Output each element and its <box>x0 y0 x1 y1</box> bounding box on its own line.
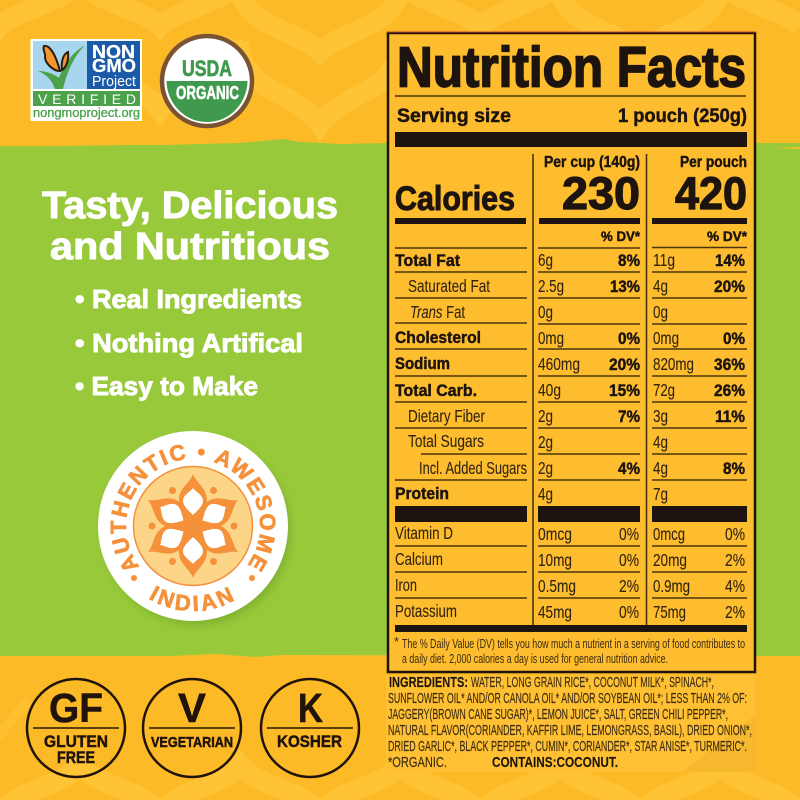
ingredients block: INGREDIENTS: <box>389 674 468 691</box>
row: total sugars: 4g <box>653 432 668 452</box>
row: total fat <box>395 250 745 270</box>
emblem: authentic awesome indian <box>98 431 292 626</box>
row: calcium: 0% <box>619 550 639 570</box>
footnote: * <box>394 634 399 649</box>
icon: kosher: K <box>298 685 323 731</box>
ingredients block: *ORGANIC. <box>388 754 447 771</box>
row: saturated fat: 20% <box>714 278 745 296</box>
row: added sugars: 4% <box>618 460 640 478</box>
row: protein: 4g <box>538 484 553 504</box>
row: trans fat: Trans Fat <box>410 302 465 322</box>
icon: gluten free: GF <box>49 685 103 731</box>
row: total carb: 72g <box>653 380 675 400</box>
row: total fat: 6g <box>538 250 553 270</box>
icon: non-GMO project verified badge: Project <box>92 74 136 90</box>
row: potassium: 75mg <box>653 602 686 622</box>
panel: nutrition facts label <box>387 32 756 672</box>
row: protein <box>395 484 668 504</box>
row: calcium: 2% <box>725 550 745 570</box>
row: saturated fat: Saturated Fat <box>408 276 490 296</box>
icon: USDA organic seal <box>162 36 252 126</box>
row: potassium: 45mg <box>538 602 572 622</box>
row: saturated fat: 2.5g <box>538 276 564 296</box>
title: Nutrition Facts <box>397 36 746 100</box>
row: cholesterol: Cholesterol <box>395 329 481 347</box>
row: cholesterol: 0mg <box>653 328 679 348</box>
row: dietary fiber: 7% <box>618 408 640 426</box>
footnote: a daily diet. 2,000 calories a day is used for general nutrition advice. <box>402 651 668 666</box>
icon: kosher: KOSHER <box>277 732 342 751</box>
row: dietary fiber: 2g <box>538 406 553 426</box>
emblem: authentic awesome indian: AUTHENTIC • AWESOME <box>110 444 276 572</box>
bullet list: • Real Ingredients <box>75 284 302 314</box>
row: calcium <box>395 549 745 570</box>
bullet list: • Easy to Make <box>75 371 258 401</box>
row: total sugars <box>408 431 668 452</box>
row: vitamin d: 0% <box>725 524 745 544</box>
heading <box>42 185 338 268</box>
row: vitamin d: 0mcg <box>653 524 685 544</box>
heading: Tasty, Delicious <box>42 185 338 227</box>
row: dietary fiber: 3g <box>653 406 668 426</box>
icon: vegetarian <box>143 679 241 777</box>
row: saturated fat: 4g <box>653 276 668 296</box>
row: cholesterol: 0% <box>723 330 745 348</box>
row: added sugars: Incl. Added Sugars <box>419 458 527 478</box>
row: dietary fiber <box>408 406 745 426</box>
row: vitamin d: 0% <box>619 524 639 544</box>
icon: USDA organic seal: USDA <box>182 56 232 81</box>
serving size <box>397 106 747 127</box>
icon: USDA organic seal: ORGANIC <box>176 83 239 103</box>
row: sodium: Sodium <box>395 355 450 373</box>
row: added sugars <box>419 458 745 478</box>
row: saturated fat <box>408 276 745 296</box>
row: sodium: 460mg <box>538 354 580 374</box>
row: total fat: 8% <box>618 252 640 270</box>
calories row: Per cup (140g) <box>544 154 640 171</box>
emblem: authentic awesome indian: INDIAN <box>149 585 234 612</box>
row: total sugars: 2g <box>538 432 553 452</box>
calories row: % DV* <box>601 229 641 244</box>
row: iron: 4% <box>725 576 745 596</box>
calories row: Per pouch <box>680 154 747 171</box>
footnote <box>394 634 745 666</box>
row: iron: Iron <box>395 575 417 595</box>
row: protein: 7g <box>653 484 668 504</box>
row: potassium: Potassium <box>395 601 457 621</box>
row: saturated fat: 13% <box>610 278 640 296</box>
row: total sugars: Total Sugars <box>408 431 484 451</box>
row: total fat: 11g <box>653 250 675 270</box>
row: calcium: 10mg <box>538 550 572 570</box>
row: potassium: 0% <box>619 602 639 622</box>
row: vitamin d: 0mcg <box>538 524 572 544</box>
icon: non-GMO project verified badge <box>30 39 142 121</box>
row: added sugars: 8% <box>723 460 745 478</box>
bullet list: • Nothing Artifical <box>75 328 303 358</box>
ingredients block: CONTAINS:COCONUT. <box>492 754 618 771</box>
row: total fat: Total Fat <box>395 252 460 270</box>
heading: and Nutritious <box>50 226 330 268</box>
row: trans fat <box>410 302 668 322</box>
icon: gluten free: GLUTEN <box>44 732 108 751</box>
ingredients block <box>386 674 755 772</box>
calories row: Calories <box>395 180 515 218</box>
row: calcium: 20mg <box>653 550 687 570</box>
row: dietary fiber: 11% <box>715 408 745 426</box>
calories row: % DV* <box>707 229 748 244</box>
icon: non-GMO project verified badge: VERIFIED <box>38 91 136 107</box>
icon: vegetarian: V <box>178 685 207 731</box>
row: cholesterol: 0% <box>618 330 640 348</box>
icon: non-GMO project verified badge: nongmoproject.org <box>33 106 140 120</box>
icon: non-GMO project verified badge: NON <box>92 42 135 62</box>
icon: kosher <box>261 679 359 777</box>
row: iron <box>395 575 745 596</box>
row: iron: 0.9mg <box>653 576 690 596</box>
serving size: Serving size <box>397 106 511 127</box>
serving size: 1 pouch (250g) <box>618 106 747 127</box>
row: total carb: 40g <box>538 380 561 400</box>
row: total carb: 15% <box>609 382 640 400</box>
row: cholesterol <box>395 328 745 348</box>
green band <box>0 139 800 657</box>
row: total carb: 26% <box>714 382 745 400</box>
row: trans fat: 0g <box>653 302 668 322</box>
icon: non-GMO project verified badge: GMO <box>92 56 136 76</box>
row: added sugars: 4g <box>653 458 668 478</box>
icon: gluten free: FREE <box>57 748 95 767</box>
icon: gluten free <box>27 679 125 777</box>
row: sodium: 20% <box>609 356 640 374</box>
row: calcium: Calcium <box>395 549 443 569</box>
row: dietary fiber: Dietary Fiber <box>408 406 485 426</box>
row: iron: 2% <box>619 576 639 596</box>
calories row: 230 <box>562 168 640 219</box>
icon: vegetarian: VEGETARIAN <box>151 734 233 751</box>
row: vitamin d <box>395 523 745 544</box>
row: added sugars: 2g <box>538 458 553 478</box>
row: protein: Protein <box>395 485 449 503</box>
row: sodium <box>395 354 745 374</box>
row: potassium: 2% <box>725 602 745 622</box>
bullet list <box>75 284 303 401</box>
row: sodium: 36% <box>714 356 745 374</box>
row: potassium <box>395 601 745 622</box>
row: trans fat: 0g <box>538 302 553 322</box>
row: sodium: 820mg <box>653 354 694 374</box>
row: total fat: 14% <box>715 252 745 270</box>
row: vitamin d: Vitamin D <box>395 523 453 543</box>
row: total carb <box>395 380 745 400</box>
calories row: 420 <box>675 168 747 219</box>
calories row <box>395 154 748 244</box>
row: iron: 0.5mg <box>538 576 576 596</box>
row: total carb: Total Carb. <box>395 382 477 400</box>
row: cholesterol: 0mg <box>538 328 564 348</box>
